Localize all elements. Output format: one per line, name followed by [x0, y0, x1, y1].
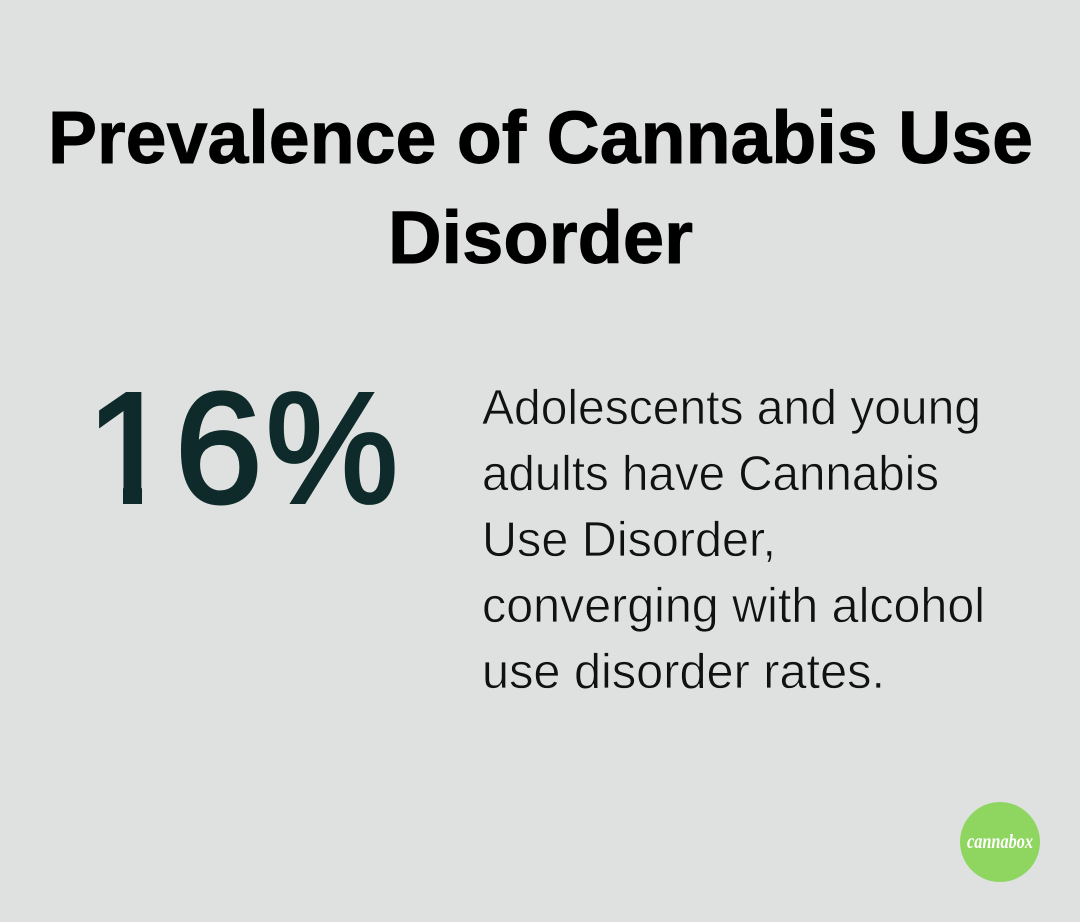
logo: cannabox badge: [960, 802, 1040, 882]
description text: [482, 381, 985, 699]
description text: use disorder rates.: [482, 645, 885, 699]
title: Prevalence of Cannabis Use: [48, 96, 1033, 179]
description text: Adolescents and young: [482, 381, 981, 435]
logo: cannabox badge: cannabox: [967, 831, 1033, 853]
big statistic: 16%: [99, 390, 395, 506]
big statistic: 16%: %: [266, 361, 398, 536]
description text: Use Disorder,: [482, 513, 776, 567]
big statistic: 16%: 6: [175, 361, 262, 536]
title: Disorder: [388, 196, 693, 279]
description text: converging with alcohol: [482, 579, 985, 633]
title: [48, 96, 1033, 279]
infographic canvas: [52, 108, 1040, 882]
description text: adults have Cannabis: [482, 447, 939, 501]
big statistic: 16%: 1: [86, 361, 173, 536]
